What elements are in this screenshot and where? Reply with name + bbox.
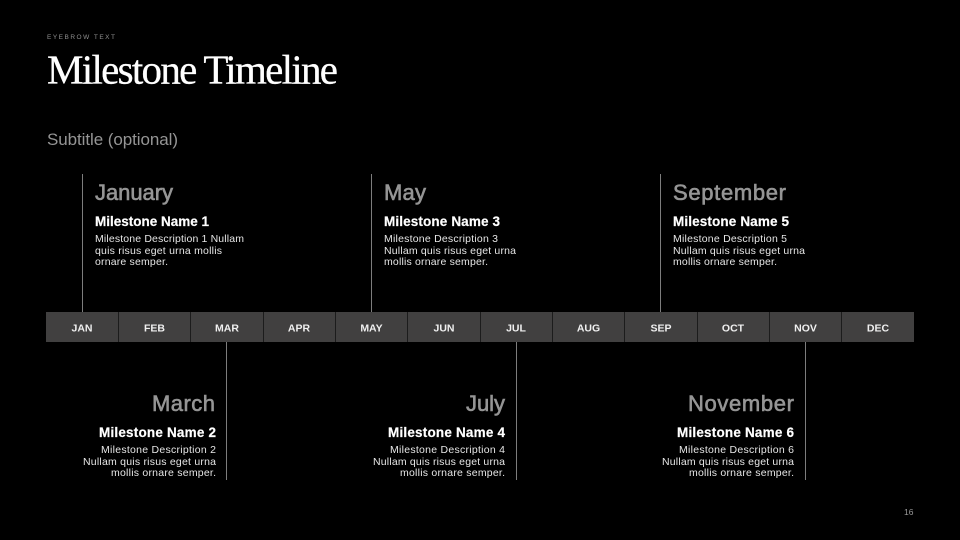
milestone: September: Nullam quis risus eget urna: [673, 245, 805, 257]
milestone: January: Milestone Description 1 Nullam: [95, 233, 244, 245]
milestone: May: Milestone Name 3: [384, 214, 500, 229]
milestone: September: mollis ornare semper.: [673, 256, 777, 268]
milestone: July: [373, 342, 516, 480]
milestone: September: Milestone Name 5: [673, 214, 789, 229]
subtitle: Subtitle (optional): [47, 130, 178, 149]
milestone: September: Milestone Description 5: [673, 233, 787, 245]
eyebrow text: EYEBROW TEXT: [47, 34, 115, 41]
milestone: January: Milestone Name 1: [95, 214, 209, 229]
timeline month bar: SEP: [650, 322, 672, 334]
milestone: July: Milestone Description 4: [390, 444, 505, 456]
timeline month bar: JAN: [71, 322, 93, 334]
milestone: January: quis risus eget urna mollis: [95, 245, 222, 257]
title: Milestone Timeline: [47, 46, 338, 92]
page number: 16: [904, 507, 914, 517]
milestone: May: May: [384, 180, 426, 205]
timeline month bar: APR: [288, 322, 311, 334]
milestone: July: Milestone Name 4: [388, 425, 505, 440]
milestone: May: Milestone Description 3: [384, 233, 498, 245]
timeline month bar: FEB: [144, 322, 165, 334]
milestone: March: March: [152, 391, 215, 416]
milestone: January: January: [95, 180, 173, 205]
milestone: March: Milestone Name 2: [99, 425, 216, 440]
milestone: September: September: [673, 180, 786, 205]
timeline month bar: JUN: [433, 322, 455, 334]
timeline month bar: OCT: [722, 322, 745, 334]
milestone: January: ornare semper.: [95, 256, 168, 268]
milestone: July: Nullam quis risus eget urna: [373, 456, 505, 468]
milestone: November: Milestone Name 6: [677, 425, 794, 440]
milestone: January: [82, 174, 244, 312]
timeline month bar: MAR: [215, 322, 239, 334]
milestone: November: Nullam quis risus eget urna: [662, 456, 794, 468]
milestone: July: July: [466, 391, 505, 416]
milestone: May: mollis ornare semper.: [384, 256, 488, 268]
milestone: November: November: [688, 391, 794, 416]
milestone: November: [662, 342, 806, 480]
milestone: May: Nullam quis risus eget urna: [384, 245, 516, 257]
milestone: May: [372, 174, 516, 312]
timeline month bar: DEC: [867, 322, 890, 334]
milestone: March: mollis ornare semper.: [111, 467, 216, 479]
timeline month bar: JUL: [506, 322, 527, 334]
milestone: November: mollis ornare semper.: [689, 467, 794, 479]
milestone: September: [660, 174, 805, 312]
milestone: March: [83, 342, 226, 480]
milestone: March: Nullam quis risus eget urna: [83, 456, 216, 468]
timeline month bar: MAY: [360, 322, 383, 334]
milestone: November: Milestone Description 6: [679, 444, 794, 456]
timeline month bar: NOV: [794, 322, 817, 334]
milestone: March: Milestone Description 2: [101, 444, 216, 456]
timeline month bar: AUG: [577, 322, 600, 334]
milestone: July: mollis ornare semper.: [400, 467, 505, 479]
timeline month bar: [46, 312, 914, 342]
